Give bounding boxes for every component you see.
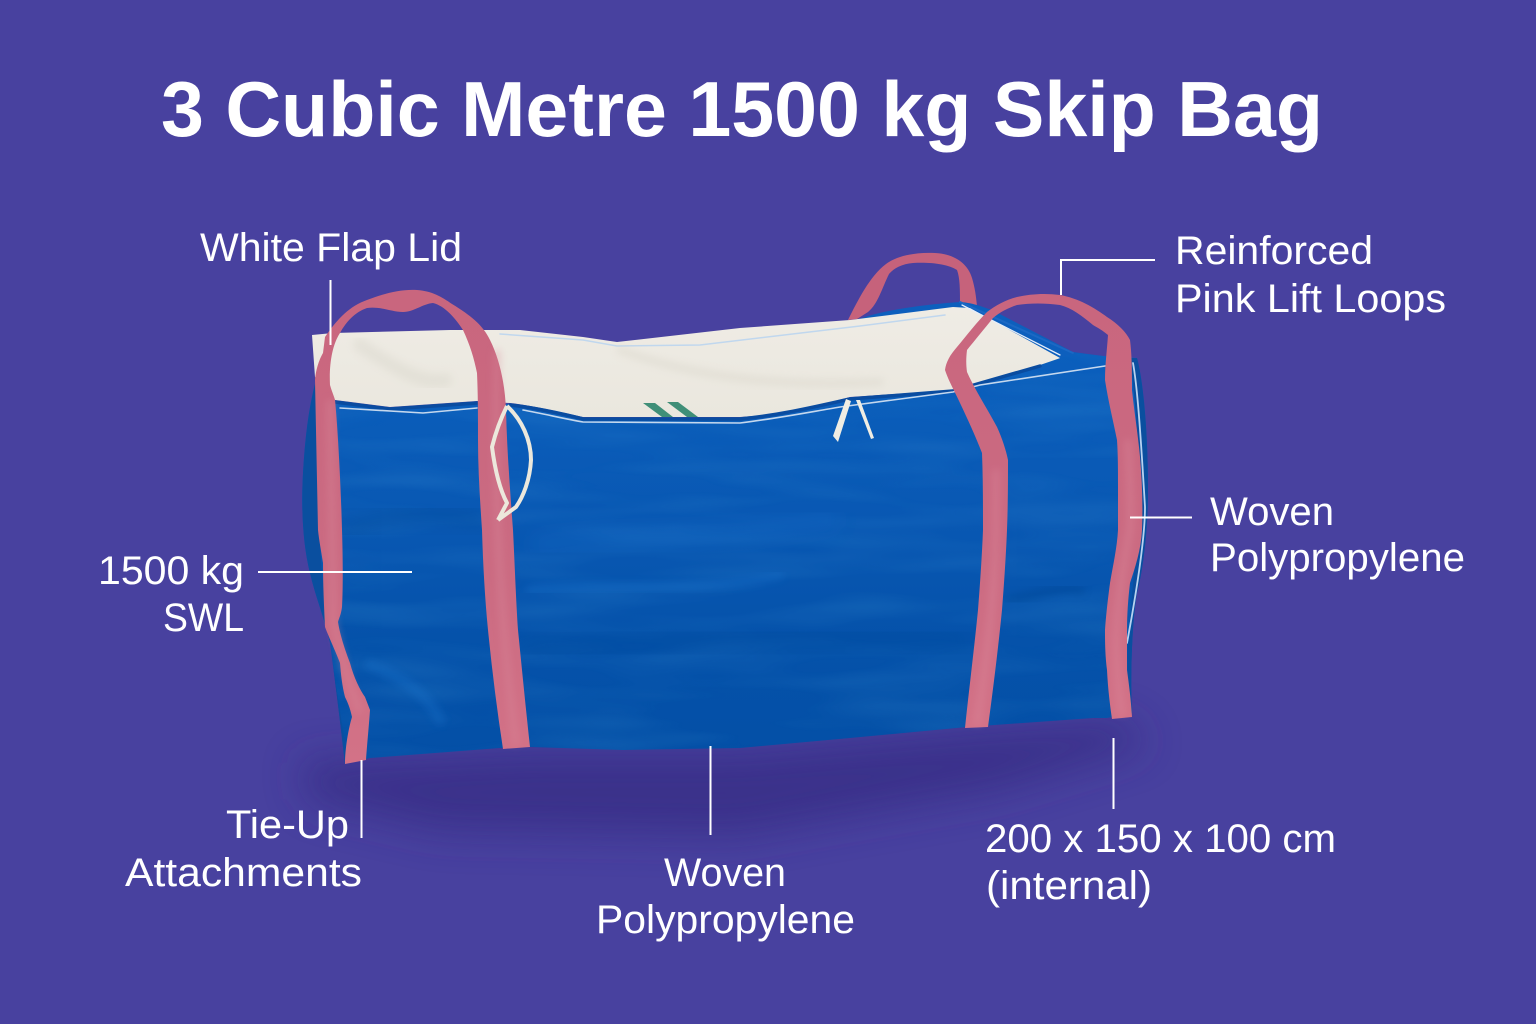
right lift loop strap xyxy=(945,294,1142,728)
back rim xyxy=(857,302,1125,372)
callout: 1500 kg SWL: 1500 kg xyxy=(98,549,244,593)
callout: reinforced pink lift loops: Reinforced xyxy=(1175,229,1373,273)
fabric mottling xyxy=(341,407,1110,750)
skip bag illustration xyxy=(300,253,1150,770)
callout: tie-up attachments xyxy=(125,760,362,895)
right strap texture xyxy=(977,440,1130,725)
left strap texture xyxy=(330,350,516,745)
callout: dimensions: 200 x 150 x 100 cm xyxy=(985,817,1336,861)
callout: woven polypropylene bottom: Woven xyxy=(664,851,786,895)
callout: reinforced pink lift loops xyxy=(1061,229,1446,321)
green stripes on inner liner xyxy=(643,402,698,417)
callout: white flap lid: White Flap Lid xyxy=(200,226,462,270)
callout: woven polypropylene right: Woven xyxy=(1210,490,1334,534)
callout: dimensions xyxy=(985,738,1336,908)
callout: woven polypropylene right xyxy=(1130,490,1465,580)
callout: woven polypropylene bottom: Polypropylene xyxy=(596,898,855,942)
left tie-up loop xyxy=(492,406,531,520)
centre tie-up ribbon xyxy=(833,399,874,442)
infographic canvas xyxy=(101,80,1464,942)
callout: woven polypropylene right: Polypropylene xyxy=(1210,536,1465,580)
callout: 1500 kg SWL: SWL xyxy=(163,596,244,640)
left end lift loop strap xyxy=(315,290,530,764)
callout: tie-up attachments: Attachments xyxy=(125,851,362,895)
white flap lid xyxy=(312,307,1060,417)
callout: woven polypropylene bottom xyxy=(596,746,855,942)
blue side panels xyxy=(302,358,1148,764)
callout: 1500 kg SWL xyxy=(98,549,412,640)
floor shadow xyxy=(300,720,1150,835)
fabric folds and highlights xyxy=(345,513,1080,720)
back lift loop xyxy=(848,253,977,320)
callout: reinforced pink lift loops: Pink Lift Loops xyxy=(1175,277,1446,321)
lid creases xyxy=(360,302,1073,383)
callout: tie-up attachments: Tie-Up xyxy=(226,803,349,847)
blue woven body xyxy=(302,353,1148,764)
hem band and stitching xyxy=(335,363,1145,643)
title: 3 Cubic Metre 1500 kg Skip Bag xyxy=(161,65,1323,153)
callout: dimensions: (internal) xyxy=(986,864,1152,908)
